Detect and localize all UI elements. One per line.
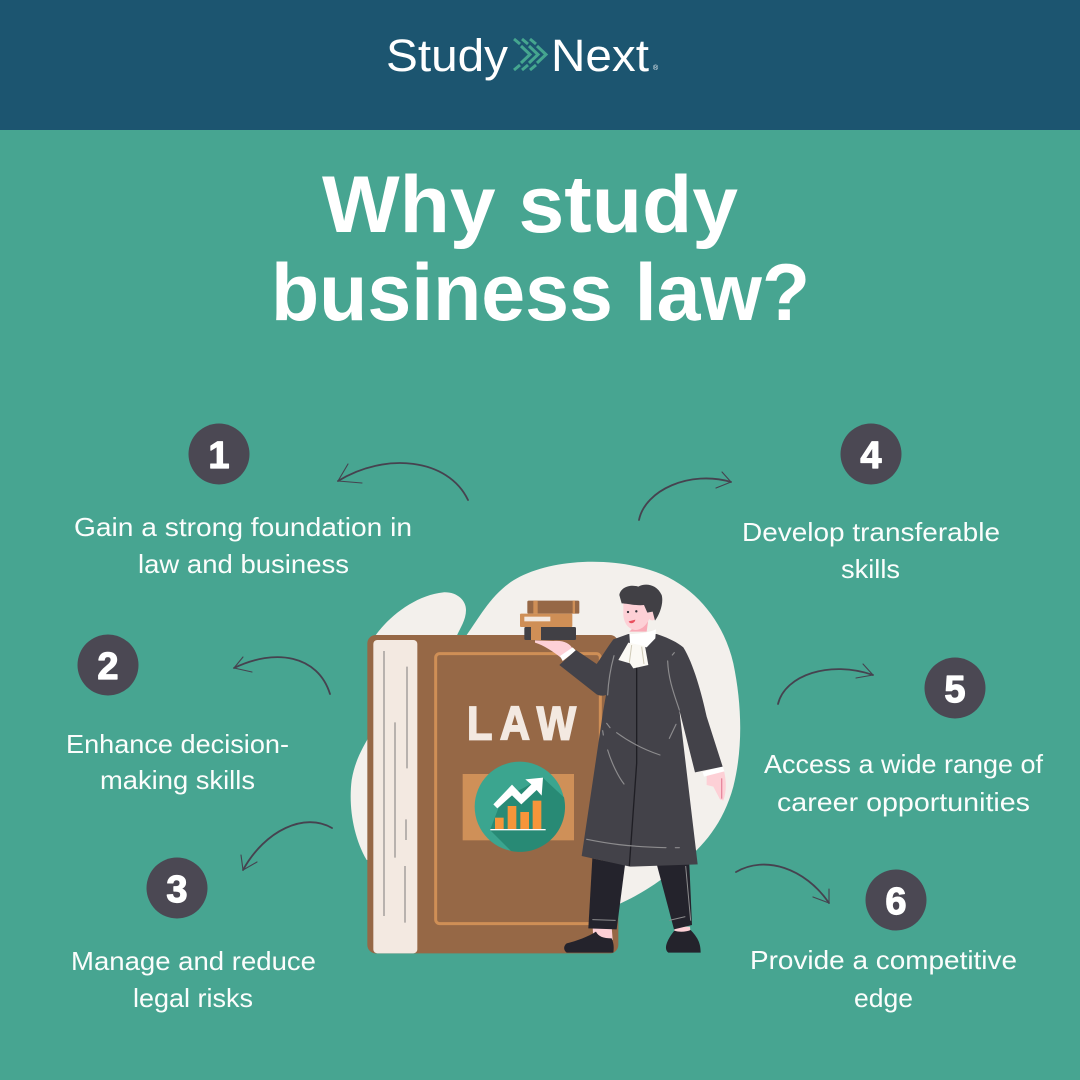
item 6 <box>750 870 1017 1013</box>
stack of books <box>520 601 579 640</box>
item 5: career opportunities <box>777 787 1030 817</box>
icon: logo chevrons <box>514 39 546 70</box>
number badge 1 <box>188 424 250 484</box>
number badge 5 <box>924 658 986 718</box>
item 2: making skills <box>100 765 255 795</box>
item 3: Manage and reduce <box>71 946 316 976</box>
item 1: Gain a strong foundation in <box>74 512 412 542</box>
item 5: 5 <box>944 669 966 711</box>
arrow 2 <box>234 657 330 694</box>
item 2: Enhance decision- <box>66 729 289 759</box>
item 2: 2 <box>97 646 119 688</box>
legs and trousers <box>564 858 701 953</box>
logo: StudyNext <box>386 30 659 81</box>
right hand and cuff <box>703 766 726 801</box>
item 1: 1 <box>208 435 230 477</box>
neck, face and hair <box>619 585 662 632</box>
title <box>271 160 810 338</box>
item 1: law and business <box>138 549 349 579</box>
item 3: 3 <box>166 869 188 911</box>
arrow 3 <box>241 822 332 870</box>
item 4 <box>742 424 1000 584</box>
item 5: Access a wide range of <box>764 749 1044 779</box>
title: business law? <box>271 248 810 338</box>
arrow 4 <box>639 472 731 520</box>
item 3: legal risks <box>133 983 253 1013</box>
arrow 5 <box>778 664 873 704</box>
item 5 <box>764 658 1044 817</box>
lawyer figure <box>535 585 726 953</box>
item 6: edge <box>854 983 913 1013</box>
item 1 <box>74 424 412 579</box>
robe <box>559 634 723 867</box>
item 3 <box>71 858 316 1013</box>
item 4: 4 <box>860 435 882 477</box>
number badge 3 <box>146 858 208 918</box>
title: Why study <box>322 160 738 250</box>
law book <box>367 635 618 953</box>
arrow 1 <box>338 463 468 500</box>
item 6: Provide a competitive <box>750 945 1017 975</box>
number badge 6 <box>866 870 926 930</box>
law book: LAW <box>467 698 577 750</box>
collar and jabot <box>618 629 656 668</box>
number badge 2 <box>78 634 138 696</box>
header band <box>0 0 1080 130</box>
left hand and cuff <box>535 640 576 661</box>
central illustration: book and lawyer <box>351 562 740 953</box>
logo: StudyNext: Study <box>386 30 509 81</box>
icon: growth chart badge <box>475 762 565 852</box>
background blob <box>351 562 740 905</box>
number badge 4 <box>840 424 902 484</box>
item 6: 6 <box>885 881 907 923</box>
logo: StudyNext: Next <box>551 30 650 81</box>
item 2 <box>66 634 289 795</box>
item 4: skills <box>841 554 900 584</box>
arrow 6 <box>736 865 829 903</box>
logo: StudyNext: ® <box>653 64 659 72</box>
item 4: Develop transferable <box>742 517 1000 547</box>
